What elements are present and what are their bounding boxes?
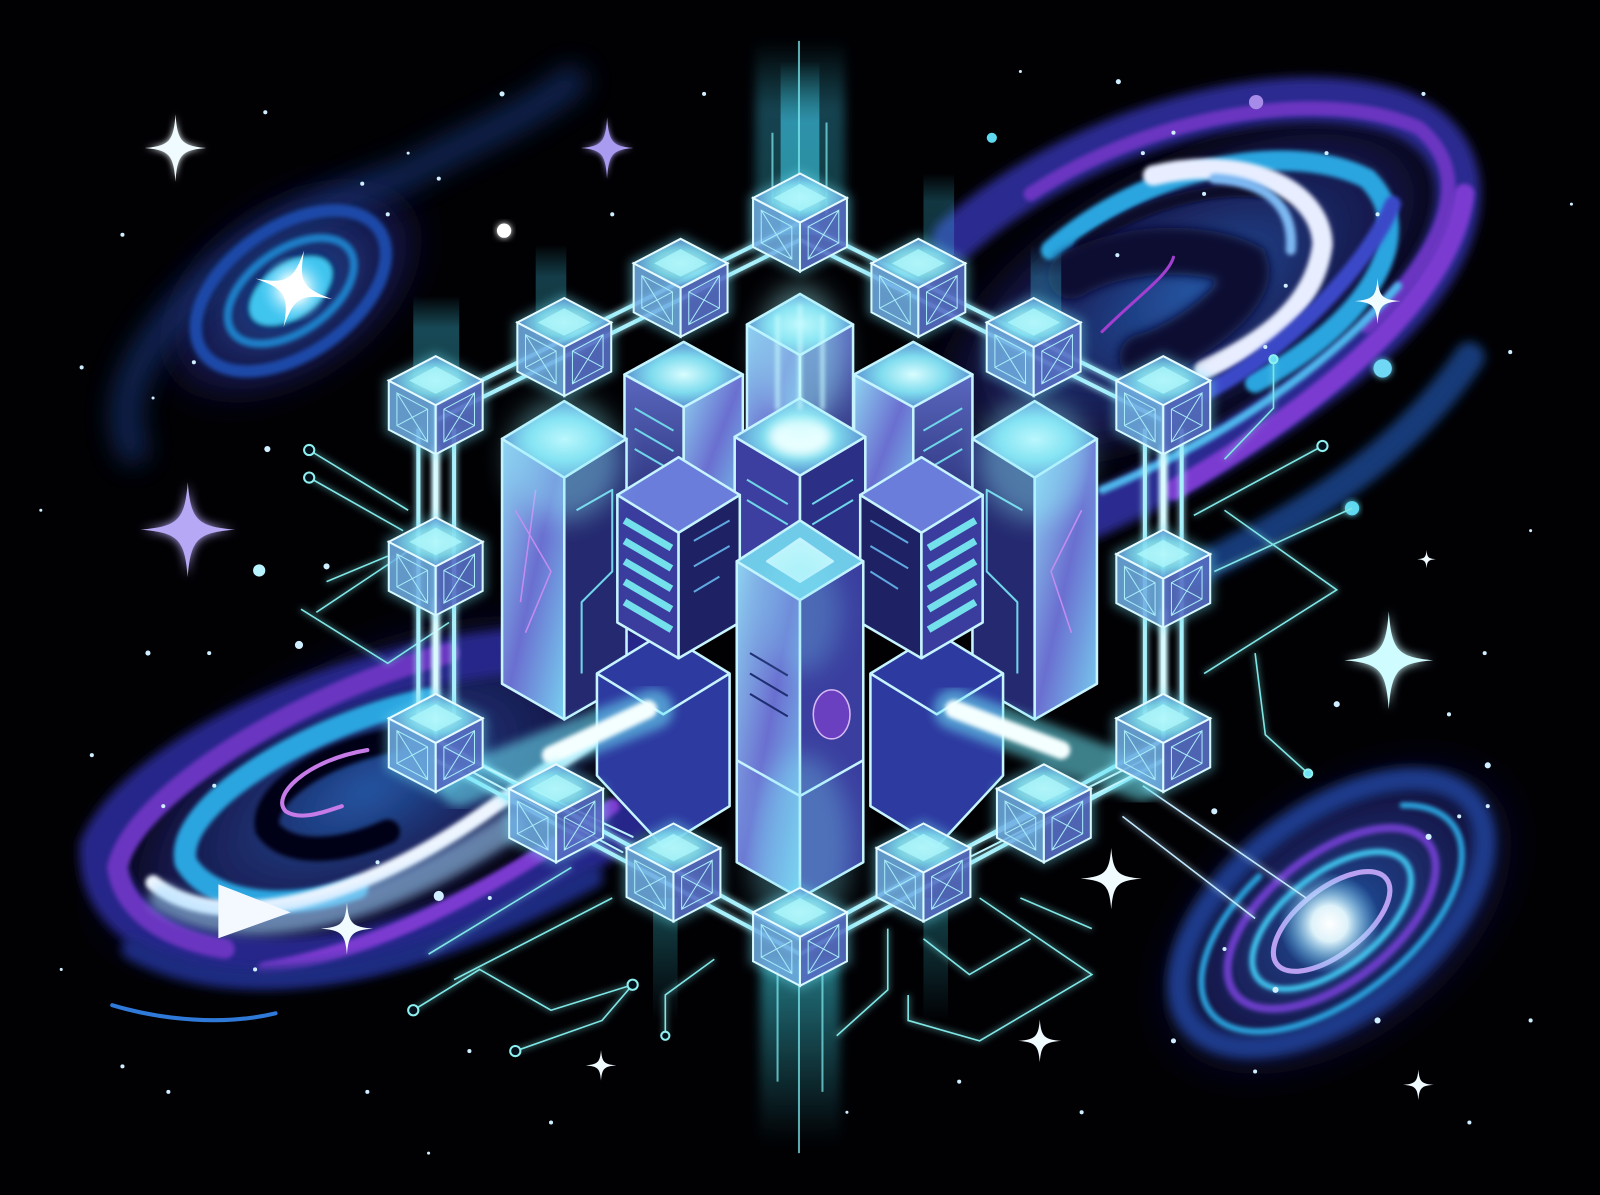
pillar: front central crystal [737,520,863,898]
galaxy: large lower left spiral [18,515,716,1066]
light tubes [436,306,1163,862]
vertical light beams [413,41,1061,1153]
pillar: centre glowing [735,398,865,622]
galaxy: large upper right spiral [843,13,1535,571]
pillar: rear left [624,342,743,531]
server: right [860,457,983,658]
circuit nodes [304,355,1328,1056]
pillar: tall left crystal [502,401,627,719]
sparkle stars [140,114,1436,1100]
pillar: rear centre [747,294,853,490]
galaxy: small upper left spiral [101,82,571,464]
block: right base with light tube [870,633,1003,847]
pillar: rear right [854,342,972,531]
galaxy: lower right spiral [1078,676,1595,1161]
lattice frame connectors [418,222,1182,954]
node cubes [385,169,1214,990]
crystal glow overlay [508,286,1091,939]
circuit traces [301,359,1352,1051]
block: left base with light tube [597,633,730,847]
server: left [617,457,740,658]
pillar: tall right crystal [972,401,1097,719]
crystal pillars [502,294,1097,898]
